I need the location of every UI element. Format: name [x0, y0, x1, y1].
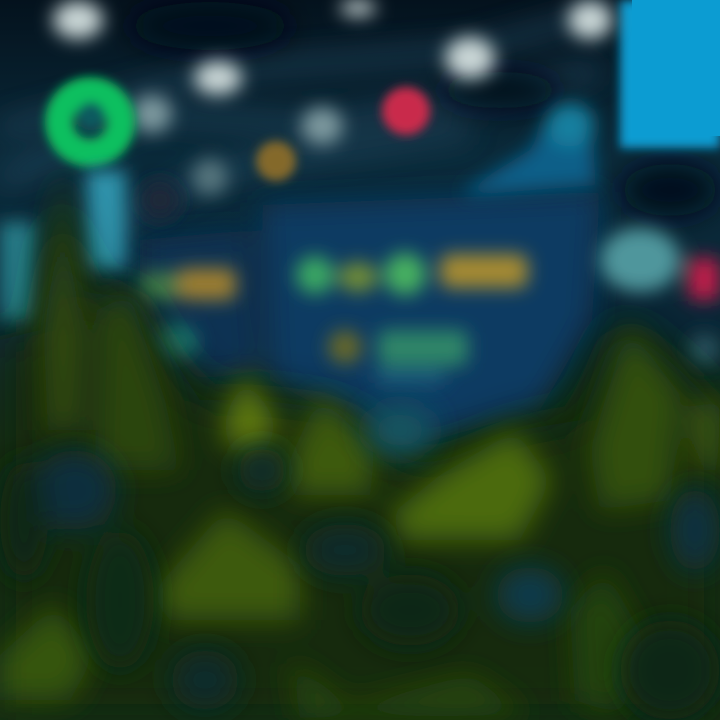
right nodes [600, 228, 720, 366]
lower label row [328, 330, 468, 384]
node [445, 37, 495, 79]
node [53, 1, 103, 39]
grey blob [688, 334, 720, 366]
node [132, 95, 172, 133]
blue corner panel [620, 0, 720, 148]
node [192, 159, 228, 195]
bright foliage [0, 170, 720, 718]
foliage base [0, 200, 720, 720]
teal blob [600, 228, 680, 292]
light nodes [53, 0, 612, 195]
central label row [296, 253, 528, 295]
green chip [384, 253, 426, 295]
red blob [688, 258, 720, 300]
green text [140, 272, 180, 300]
node [301, 107, 343, 145]
teal gap [366, 404, 434, 456]
blue text [375, 370, 445, 384]
teal chip [154, 324, 198, 360]
dim node [140, 180, 180, 220]
node [194, 61, 242, 95]
red node [382, 87, 430, 135]
orange text [178, 268, 236, 300]
node [340, 0, 376, 16]
olive chip [338, 262, 378, 292]
green ring node [59, 91, 121, 153]
dark blue foliage shadows [0, 448, 720, 720]
teal text [378, 330, 468, 366]
blue chart shape [462, 103, 596, 195]
ring centre [77, 102, 105, 130]
far-left teal bar [0, 222, 36, 322]
ring [59, 91, 121, 153]
green chip [296, 256, 334, 294]
orange text [440, 254, 528, 288]
orange chip [328, 330, 362, 364]
left label row [140, 268, 236, 360]
central blue panel [140, 192, 600, 450]
network lines [0, 10, 610, 230]
node [568, 1, 612, 39]
dark top patches [130, 2, 718, 216]
orange node [256, 141, 296, 181]
left light-blue column [86, 170, 126, 270]
